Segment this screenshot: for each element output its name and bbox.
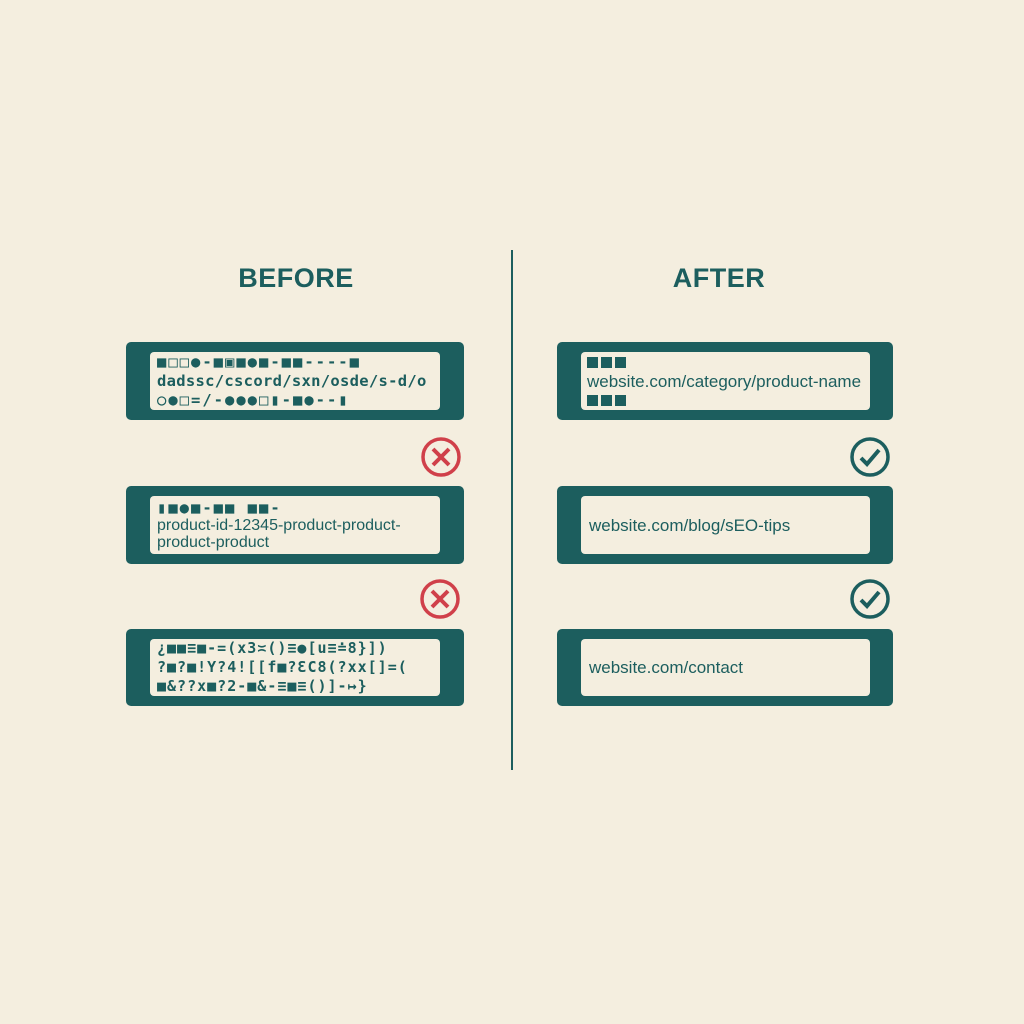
panel: before url 3: [126, 629, 464, 706]
panel: after url 3: [557, 629, 893, 706]
panel: before url 3: ?■?■!Y?4![[f■?ƐC8(?xx[]=(: [157, 658, 408, 676]
panel: before url 1: ○●□=/-●●●□▮-■●--▮: [157, 390, 350, 408]
panel: after url 1: website.com/category/product-name: [587, 372, 861, 390]
panel: before url 3: ■&??x■?2-■&-≡■≡()]-↦}: [157, 677, 368, 695]
panel: before url 1: [126, 342, 464, 420]
icon: check 1: [850, 437, 890, 477]
panel: after url 2: [557, 486, 893, 564]
icon: cross 2: [420, 579, 460, 619]
title: before: BEFORE: [238, 263, 354, 293]
panel: before url 3: ¿■■≡■-=(x3≍()≡●[u≡≐8}]): [157, 639, 388, 657]
panel: before url 1: ■□□●-■▣■●■-■■----■: [157, 352, 361, 370]
icon: check 2: [850, 579, 890, 619]
panel: after url 1: [557, 342, 893, 420]
title: after: AFTER: [673, 263, 765, 293]
panel: after url 2: website.com/blog/sEO-tips: [589, 516, 790, 534]
panel: before url 2: product-id-12345-product-product-: [157, 516, 401, 534]
divider: [511, 250, 513, 770]
panel: before url 1: dadssc/cscord/sxn/osde/s-d/o: [157, 372, 427, 390]
panel: before url 2: product-product: [157, 534, 269, 550]
panel: before url 2: ▮■●■-■■ ■■-: [157, 498, 282, 516]
panel: after url 3: website.com/contact: [589, 658, 743, 677]
panel: before url 2: [126, 486, 464, 564]
icon: cross 1: [421, 437, 461, 477]
